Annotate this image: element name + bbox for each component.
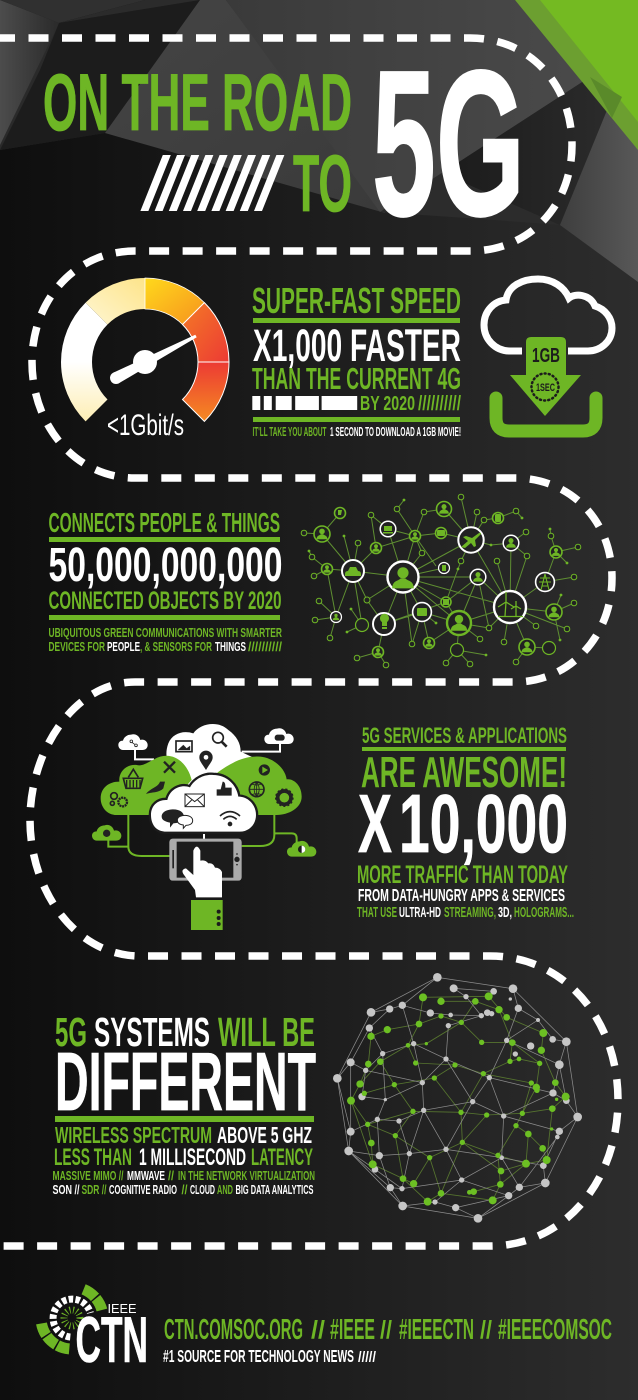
sphere green links <box>351 996 566 1202</box>
line: technologies one <box>52 1168 315 1183</box>
right green cloud <box>217 757 302 815</box>
caption: uses: ULTRA-HD <box>399 905 441 921</box>
network diagram <box>301 494 581 668</box>
heading: different: DIFFERENT <box>55 1035 316 1128</box>
top cloud <box>166 724 255 797</box>
caption line two <box>48 639 282 654</box>
panel: connects people and things <box>48 494 581 668</box>
title word: to: TO <box>293 139 352 229</box>
line: technologies one: // <box>168 1168 174 1183</box>
network small nodes <box>301 494 581 668</box>
line: technologies two: CLOUD <box>190 1182 215 1197</box>
icon: speedometer gauge <box>61 278 229 421</box>
network dots <box>308 499 568 656</box>
line: technologies one: IN THE NETWORK VIRTUALIZATION <box>178 1168 315 1183</box>
caption: download time: 1 SECOND TO DOWNLOAD A 1GB MOVIE! <box>330 424 461 439</box>
network white ring nodes <box>330 521 554 635</box>
line: technologies two: SON // <box>52 1182 80 1197</box>
logo rings <box>42 1289 102 1349</box>
footer tagline <box>163 1346 377 1366</box>
title <box>43 28 525 260</box>
caption: uses: 3D, <box>498 905 512 921</box>
line: technologies one: MMWAVE <box>127 1168 165 1183</box>
panel: speed <box>61 278 612 442</box>
title stripes <box>140 155 284 211</box>
caption line two: DEVICES FOR <box>48 639 105 654</box>
line: spectrum: WIRELESS SPECTRUM <box>55 1122 212 1148</box>
stat: 50 billion: 50,000,000,000 <box>48 539 282 592</box>
sphere grey nodes <box>333 973 582 1223</box>
line: technologies one: MASSIVE MIMO // <box>52 1168 124 1183</box>
caption line one: UBIQUITOUS GREEN COMMUNICATIONS WITH SMARTER <box>48 625 282 640</box>
line: technologies two: AND <box>217 1182 233 1197</box>
footer links: // <box>311 1316 325 1344</box>
heading: 5g systems will be: SYSTEMS <box>94 1009 210 1055</box>
stat: x10,000: X <box>358 777 392 870</box>
footer tagline: #1 SOURCE FOR TECHNOLOGY NEWS <box>163 1346 354 1366</box>
sphere network <box>333 973 582 1223</box>
left green cloud <box>101 756 192 815</box>
green corner triangle <box>515 0 638 150</box>
footer links: #IEEE <box>330 1314 375 1346</box>
green rule <box>253 417 460 422</box>
line: technologies two: SDR // <box>82 1182 107 1197</box>
gauge label: <1Gbit/s <box>107 409 184 442</box>
hand <box>182 847 222 897</box>
line: latency: 1 MILLISECOND <box>139 1144 246 1171</box>
caption line two: THINGS <box>215 639 246 654</box>
caption: uses: STREAMING, <box>444 905 496 921</box>
logo ieee: IEEE <box>108 1301 137 1316</box>
network white ring icons <box>333 526 551 629</box>
footer links: #IEEECTN <box>399 1314 474 1346</box>
heading: 5g systems will be: WILL BE <box>218 1009 315 1055</box>
title line: on the road: ON THE ROAD <box>43 58 352 148</box>
footer links <box>164 1314 612 1346</box>
green rule <box>49 537 280 542</box>
icon: cloud download: 1GB <box>532 345 560 367</box>
heading: 5g systems will be: 5G <box>55 1009 87 1055</box>
progress bar <box>252 396 357 410</box>
small clouds <box>92 728 316 857</box>
network person icons <box>317 504 560 656</box>
low-poly header backdrop <box>0 0 638 282</box>
green rule <box>55 1116 314 1122</box>
footer links: // <box>380 1316 392 1344</box>
line: technologies two: // <box>182 1182 188 1197</box>
network links <box>304 497 578 665</box>
line: latency: LESS THAN <box>54 1144 132 1171</box>
icon: cloud download <box>484 279 612 431</box>
cuff <box>191 900 223 930</box>
line: technologies two: BIG DATA ANALYTICS <box>236 1182 314 1197</box>
phone <box>169 839 242 881</box>
caption: download time: IT'LL TAKE YOU ABOUT <box>252 424 327 439</box>
caption line two: ////////// <box>248 639 282 654</box>
icon: cloud apps illustration <box>92 724 316 930</box>
caption: uses <box>357 905 574 921</box>
line: spectrum: ABOVE 5 GHZ <box>217 1122 312 1148</box>
stripes: ////////// <box>418 393 461 415</box>
stat: x1,000 faster: X1,000 FASTER <box>253 320 461 371</box>
line: technologies two: COGNITIVE RADIO <box>109 1182 177 1197</box>
footer <box>42 1289 612 1376</box>
line: technologies two <box>52 1182 314 1197</box>
sphere grey links <box>337 977 578 1218</box>
subheading: connected objects: CONNECTED OBJECTS BY 2020 <box>48 588 282 615</box>
logo ctn: CTN <box>76 1303 148 1376</box>
green rule <box>253 318 460 323</box>
footer links: // <box>480 1316 492 1344</box>
heading: connects people and things: CONNECTS PEOPLE & THINGS <box>48 507 280 538</box>
footer tagline: ///// <box>358 1349 377 1366</box>
panel: systems <box>52 973 582 1223</box>
footer links: CTN.COMSOC.ORG <box>164 1314 303 1346</box>
subheading: current 4g: THAN THE CURRENT 4G <box>252 362 461 396</box>
stat: x10,000 <box>358 777 568 870</box>
by 2020: BY 2020 <box>360 393 415 415</box>
panel: services and applications <box>92 723 574 930</box>
sphere green nodes <box>347 992 570 1206</box>
icon: cloud download: 1SEC <box>536 382 555 394</box>
front white cloud <box>151 775 256 832</box>
heading: super-fast speed: SUPER-FAST SPEED <box>252 280 461 321</box>
caption line two: PEOPLE <box>107 639 140 654</box>
logo: ieee ctn <box>42 1289 148 1376</box>
caption: uses: THAT USE <box>357 905 397 921</box>
green rule <box>362 747 566 751</box>
caption: uses: HOLOGRAMS... <box>514 905 574 921</box>
line: latency <box>54 1144 313 1171</box>
caption line two: , & SENSORS FOR <box>140 639 212 654</box>
cloud icons <box>103 732 305 853</box>
line: latency: LATENCY <box>251 1144 313 1171</box>
connectors <box>108 743 297 856</box>
green rule <box>49 615 280 620</box>
network green nodes <box>314 502 562 658</box>
